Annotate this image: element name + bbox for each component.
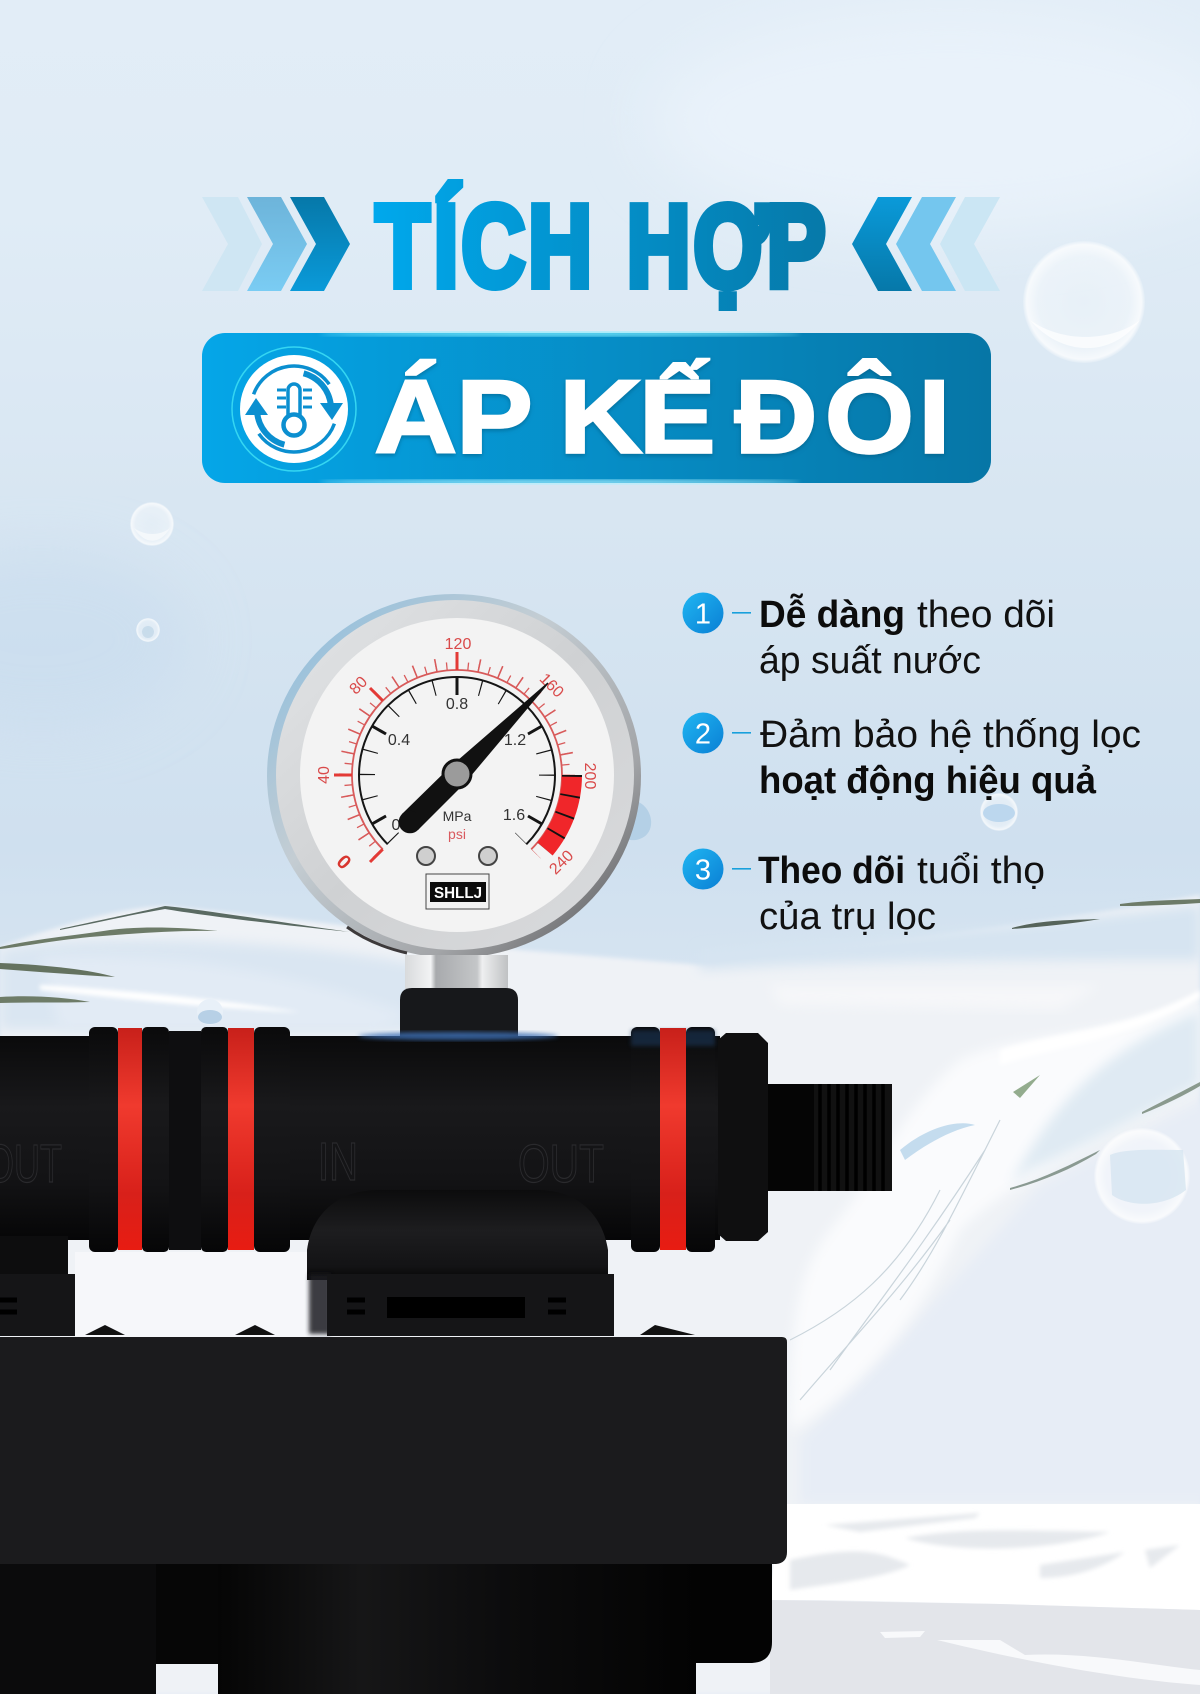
background: white foreground band: [770, 1504, 1200, 1694]
feature 1: 1: [695, 598, 711, 630]
gauge droplet: [622, 800, 651, 840]
gauge labels: 0: [333, 850, 356, 873]
gauge needle: [399, 682, 548, 833]
bubble: top right: [1023, 241, 1145, 363]
feature 3: của trụ lọc: [759, 896, 936, 938]
feature 2: hoạt động hiệu quả: [759, 760, 1097, 802]
feature list: [682, 592, 1141, 938]
gauge brand logo: SHLLJ: [434, 885, 482, 902]
feature 2: Đảm bảo hệ thống lọc: [760, 714, 1141, 756]
center elbow: [307, 1190, 608, 1280]
feature 1: theo dõi: [917, 594, 1055, 636]
feature 2: [682, 712, 1141, 802]
feature 3: tuổi thọ: [917, 850, 1045, 892]
bubble: left large: [130, 502, 174, 546]
mounting block: [0, 1337, 787, 1564]
feature 3: Theo dõi: [758, 850, 905, 892]
red psi scale: [334, 652, 568, 862]
gauge labels: 240: [546, 847, 577, 878]
gauge labels: 1.2: [504, 732, 526, 749]
feature 1: Dễ dàng: [759, 592, 905, 636]
feature 3: [682, 848, 1045, 938]
embossed port labels: IN: [318, 1132, 358, 1192]
gauge labels: 0: [392, 817, 401, 834]
hex nut: [718, 1033, 768, 1241]
gauge labels: 160: [536, 670, 567, 701]
background: lower right haze: [800, 1085, 1200, 1504]
bubble: lower right: [1094, 1128, 1190, 1224]
feature 3: 3: [695, 854, 711, 886]
feature 1: áp suất nước: [759, 640, 981, 682]
pressure gauge: [267, 594, 641, 1040]
background: area between fittings: [75, 1252, 320, 1338]
gauge bezel: [267, 594, 641, 958]
blue glow under collar: [358, 1032, 558, 1040]
background: water splash: [790, 990, 1200, 1430]
decorative chevrons left: [202, 197, 350, 291]
gauge stem: [405, 955, 508, 989]
banner: ÁP KẾ ĐÔI: [202, 332, 991, 484]
left elbow: [0, 1236, 75, 1336]
background: dark water streaks: [0, 899, 1200, 1003]
decorative chevrons right: [852, 197, 1000, 291]
center fitting ring: [309, 1274, 614, 1336]
red band 1: [118, 1028, 142, 1250]
rear dark shoulder left: [156, 1564, 218, 1664]
gauge labels: 1.6: [503, 807, 525, 824]
gauge face: [300, 618, 614, 932]
red zone: [545, 775, 572, 849]
gauge labels: 0.8: [446, 696, 468, 713]
heading: TÍCH HỢP: TÍCH HỢP: [376, 181, 826, 311]
gauge brand logo: [426, 874, 489, 909]
feature 1: [682, 592, 1055, 682]
gauge labels: 120: [445, 636, 471, 653]
left filter cylinder: [0, 1564, 156, 1694]
left ring set: [89, 1027, 290, 1252]
gauge labels: 40: [316, 766, 333, 784]
bubble: left small: [136, 618, 160, 642]
gauge labels: 80: [347, 673, 371, 698]
feature 2: 2: [695, 718, 711, 750]
threaded outlet: [768, 1084, 892, 1191]
black MPa scale: [359, 677, 555, 844]
gauge labels: 200: [581, 763, 598, 789]
icon: thermometer with circular arrows: [232, 347, 356, 471]
gauge labels: psi: [448, 826, 466, 842]
embossed port labels: [0, 1132, 604, 1194]
bubble: on water: [197, 999, 223, 1025]
bubble: beside text: [980, 793, 1018, 831]
gauge labels: MPa: [443, 808, 472, 824]
red band 3: [660, 1028, 686, 1250]
gauge labels: [316, 636, 598, 878]
red band 2: [228, 1028, 254, 1250]
gauge labels: 0.4: [388, 732, 410, 749]
rear dark shoulder right: [695, 1564, 772, 1663]
gauge screws: [417, 847, 497, 865]
manifold tube: [0, 1036, 720, 1240]
background: water surface: [0, 895, 1200, 1694]
gauge collar: [400, 988, 518, 1040]
mounting clips: [85, 1325, 695, 1335]
embossed port labels: OUT: [518, 1134, 604, 1194]
filter housing: [0, 1027, 892, 1694]
center filter cylinder: [218, 1564, 696, 1694]
right ring set: [631, 1027, 715, 1252]
banner text: ÁP KẾ ĐÔI: [374, 359, 950, 476]
